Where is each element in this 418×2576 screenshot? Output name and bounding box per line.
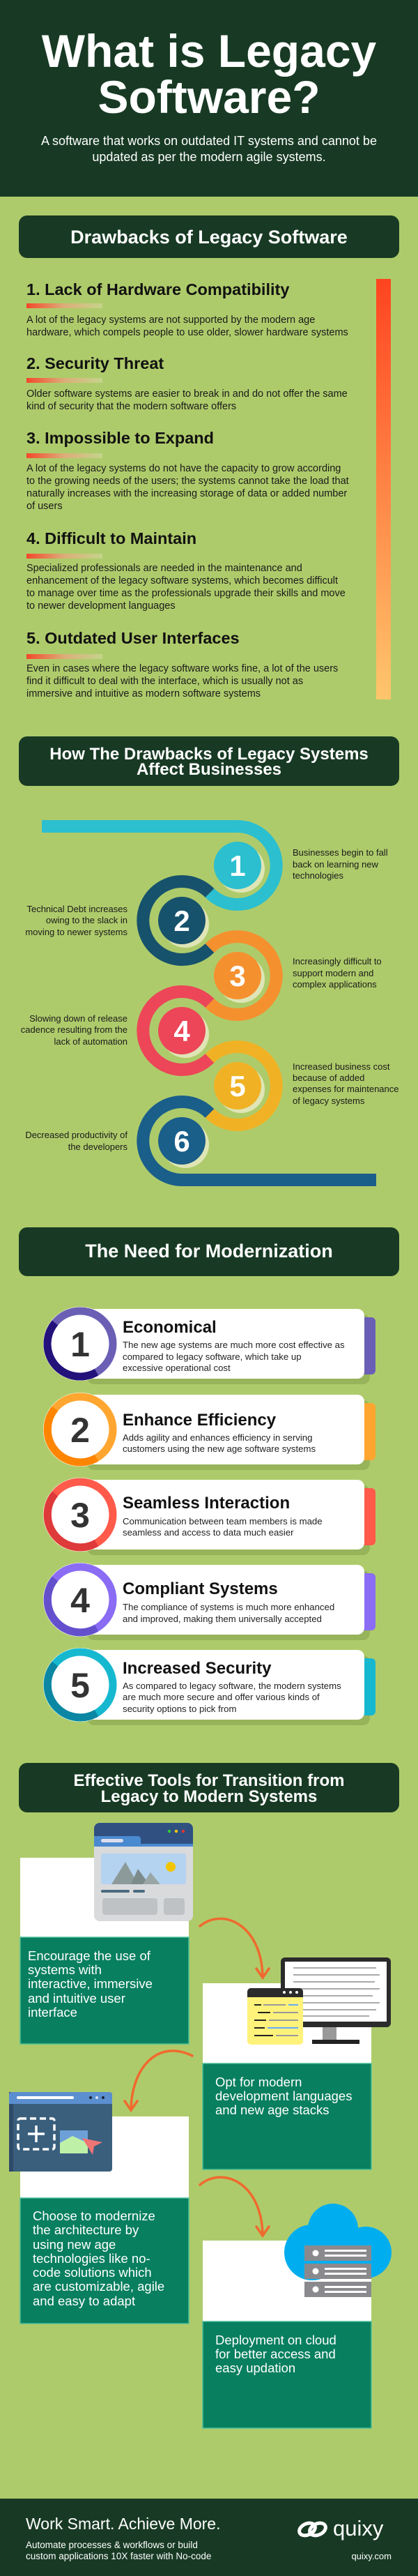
tool card 3: are customizable, agile (33, 2279, 164, 2294)
tool card 3: technologies like no- (33, 2251, 150, 2266)
drawback 3: to the growing needs of the users; the systems cannot take the load that (26, 476, 349, 487)
subtitle: updated as per the modern agile systems. (92, 150, 326, 164)
spiral texts: expenses for maintenance (293, 1084, 398, 1094)
spiral texts: moving to newer systems (25, 927, 127, 937)
vertical gradient bar (376, 279, 391, 699)
tool card 2: development languages (215, 2089, 352, 2103)
card 5: increased security: As compared to legacy software, the modern systems (123, 1681, 341, 1691)
circle 5: 5 (229, 1070, 246, 1103)
card 2: enhance efficiency (43, 1393, 376, 1470)
tool card 3: the architecture by (33, 2222, 139, 2237)
card 4: compliant systems: Compliant Systems (123, 1579, 278, 1598)
tool card 3: Choose to modernize (33, 2208, 155, 2223)
spiral texts (21, 847, 398, 1152)
drawback 5: immersive and intuitive as modern software systems (26, 688, 261, 699)
card 2: enhance efficiency: customers using the new age software systems (123, 1444, 316, 1454)
tool card 4: for better access and (215, 2347, 336, 2361)
icon: no-code builder window (9, 2092, 112, 2172)
logo: quixy (297, 2516, 384, 2540)
drawback 5 (26, 629, 338, 699)
card 5: increased security: Increased Security (123, 1659, 272, 1678)
tool card 2 (203, 1983, 371, 2169)
card 1: economical (43, 1307, 376, 1384)
arrow 2 (125, 2051, 192, 2110)
heading: how drawbacks affect: Affect Businesses (137, 760, 281, 779)
tool card 4: Deployment on cloud (215, 2333, 336, 2347)
drawback 1: 1. Lack of Hardware Compatibility (26, 280, 289, 298)
drawback 4 (26, 529, 346, 612)
footer: Automate processes & workflows or build (26, 2540, 198, 2550)
card 1: economical: excessive operational cost (123, 1363, 231, 1373)
card 1: economical: 1 (70, 1325, 90, 1364)
card 4: compliant systems: and improved, making them universally accepted (123, 1614, 322, 1624)
spiral texts: because of added (293, 1073, 364, 1083)
tool card 4: easy updation (215, 2361, 295, 2375)
drawback 2: 2. Security Threat (26, 354, 164, 372)
drawback 2 (26, 354, 348, 412)
card 3: seamless interaction: Communication between team members is made (123, 1516, 323, 1526)
tool card 3: code solutions which (33, 2265, 152, 2280)
drawback 3: A lot of the legacy systems do not have the capacity to grow according (26, 463, 341, 474)
card 5: increased security: are much more secure and offer various kinds of (123, 1692, 320, 1702)
card 4: compliant systems (43, 1563, 376, 1640)
drawback 2: Older software systems are easier to break in and do not offer the same (26, 388, 348, 400)
spiral chart (21, 826, 398, 1180)
spiral texts: the developers (68, 1142, 127, 1152)
card 4: compliant systems: The compliance of systems is much more enhanced (123, 1602, 334, 1612)
tool card 1: and intuitive user (28, 1991, 125, 2006)
icon: cloud servers (284, 2204, 392, 2297)
card 5: increased security: 5 (70, 1666, 90, 1705)
card 2: enhance efficiency: 2 (70, 1411, 90, 1450)
drawback 1: hardware, which compels people to use older, slower hardware systems (26, 327, 348, 338)
heading: drawbacks (19, 215, 399, 258)
spiral texts: Increased business cost (293, 1061, 390, 1072)
tool card 4 (203, 2241, 371, 2428)
heading: how drawbacks affect: How The Drawbacks of Legacy Systems (49, 745, 369, 764)
tool card 3: and easy to adapt (33, 2294, 135, 2308)
logo: quixy: quixy (333, 2516, 384, 2540)
footer: quixy.com (351, 2551, 392, 2561)
arrow 3 (200, 2177, 269, 2236)
title: What is Legacy (42, 25, 377, 77)
arrow 1 (200, 1918, 269, 1978)
drawback 4: to newer development languages (26, 600, 176, 612)
drawback 3: of users (26, 501, 63, 512)
drawback 2: kind of security that the modern software offers (26, 401, 236, 412)
tool card 1: systems with (28, 1962, 102, 1977)
spiral texts: back on learning new (293, 859, 378, 870)
drawback 1: A lot of the legacy systems are not supported by the modern age (26, 315, 315, 326)
circle 2 (158, 897, 206, 944)
drawback 5: find it difficult to deal with the interface, which is usually not as (26, 676, 303, 687)
drawback 1 (26, 280, 348, 338)
spiral texts: support modern and (293, 968, 373, 978)
circle 4 (158, 1007, 206, 1054)
card 1: economical: compared to legacy software, which take up (123, 1351, 302, 1362)
tool card 2: Opt for modern (215, 2075, 302, 2089)
card 1: economical: The new age systems are much more cost effective as (123, 1340, 345, 1350)
card 4: compliant systems: 4 (70, 1581, 90, 1620)
footer: Work Smart. Achieve More. (26, 2515, 220, 2533)
footer (0, 2499, 418, 2576)
circle 5 (214, 1062, 261, 1109)
tool card 1: interactive, immersive (28, 1976, 153, 1991)
tool card 3: using new age (33, 2237, 116, 2252)
footer: custom applications 10X faster with No-code (26, 2551, 211, 2561)
card 5: increased security: security options to pick from (123, 1704, 236, 1714)
drawback 5: Even in cases where the legacy software works fine, a lot of the users (26, 663, 338, 674)
drawback 4: Specialized professionals are needed in the maintenance and (26, 563, 302, 574)
circle 6 (158, 1117, 206, 1165)
card 5: increased security (43, 1648, 376, 1725)
spiral texts: Slowing down of release (29, 1013, 127, 1024)
drawback 4: enhancement of the legacy software systems, which becomes difficult (26, 575, 338, 586)
spiral texts: owing to the slack in (46, 915, 127, 925)
spiral texts: Decreased productivity of (25, 1130, 127, 1140)
circle 2: 2 (173, 904, 190, 937)
tool card 3 (20, 2116, 189, 2324)
heading: effective tools: Legacy to Modern Systems (101, 1787, 317, 1806)
spiral texts: Increasingly difficult to (293, 956, 382, 967)
card 3: seamless interaction: 3 (70, 1496, 90, 1535)
heading: need for modernization (19, 1227, 399, 1276)
subtitle: A software that works on outdated IT systems and cannot be (41, 134, 377, 148)
card 1: economical: Economical (123, 1318, 217, 1337)
circle 3 (214, 952, 261, 999)
tool card 1 (20, 1858, 189, 2044)
drawback 3: 3. Impossible to Expand (26, 429, 214, 447)
drawback 3 (26, 429, 349, 512)
spiral texts: Technical Debt increases (26, 904, 127, 914)
circle 1: 1 (229, 849, 246, 882)
heading: effective tools (19, 1763, 399, 1812)
card 2: enhance efficiency: Adds agility and enhances efficiency in serving (123, 1432, 312, 1443)
spiral texts: cadence resulting from the (21, 1024, 127, 1035)
heading: need for modernization: The Need for Modernization (85, 1241, 333, 1262)
spiral texts: of legacy systems (293, 1096, 365, 1106)
drawback 4: 4. Difficult to Maintain (26, 529, 196, 547)
spiral texts: lack of automation (54, 1036, 127, 1047)
spiral texts: technologies (293, 870, 343, 881)
title: Software? (98, 71, 320, 123)
card 3: seamless interaction: seamless and access to data much easier (123, 1527, 294, 1538)
header (0, 0, 418, 197)
circle 4: 4 (173, 1015, 190, 1047)
tool card 1: Encourage the use of (28, 1948, 151, 1963)
icon: browser window (94, 1823, 193, 1921)
heading: drawbacks: Drawbacks of Legacy Software (70, 227, 348, 248)
circle 6: 6 (173, 1125, 190, 1158)
heading: effective tools: Effective Tools for Transition from (74, 1771, 344, 1790)
drawback 4: to manage over time as the professionals upgrade their skills and move (26, 588, 346, 599)
icon: monitor with code (247, 1957, 391, 2045)
circle 1 (214, 842, 261, 889)
circle 3: 3 (229, 960, 246, 992)
tool card 2: and new age stacks (215, 2103, 330, 2117)
tool card 1: interface (28, 2005, 77, 2020)
card 3: seamless interaction: Seamless Interaction (123, 1494, 290, 1513)
card 2: enhance efficiency: Enhance Efficiency (123, 1411, 277, 1430)
spiral texts: complex applications (293, 979, 377, 990)
heading: how drawbacks affect (19, 736, 399, 786)
drawback 3: naturally increases with the increasing storage of data or added number (26, 488, 347, 499)
drawback 5: 5. Outdated User Interfaces (26, 629, 240, 647)
spiral texts: Businesses begin to fall (293, 847, 388, 858)
card 3: seamless interaction (43, 1478, 376, 1555)
